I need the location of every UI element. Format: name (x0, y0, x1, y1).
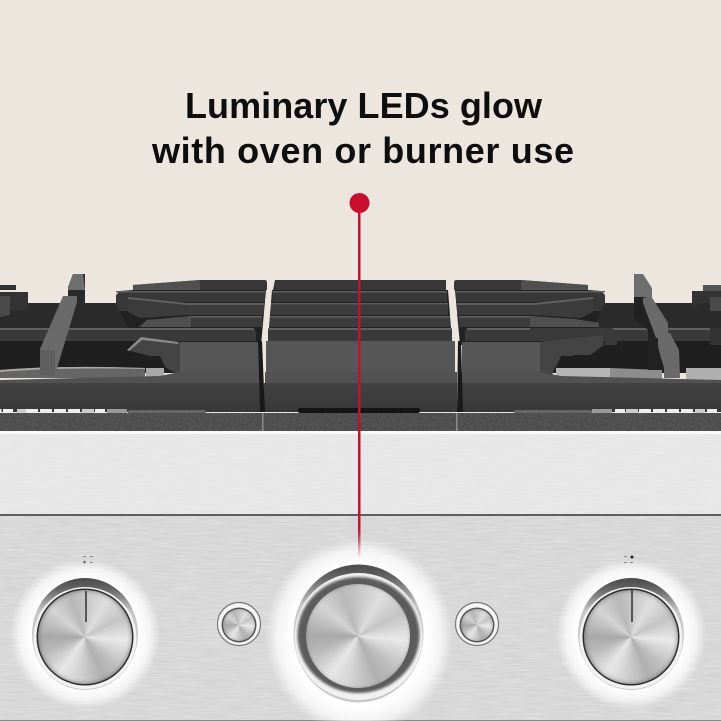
upper steel panel (0, 431, 721, 514)
centre grate (258, 280, 463, 413)
left grate (0, 280, 267, 412)
title: with oven or burner use (151, 130, 574, 171)
burner caps (0, 367, 721, 380)
indicator dots left (83, 556, 93, 563)
cooktop surface (0, 413, 721, 431)
right knob pointer (630, 590, 632, 622)
lower steel panel (0, 514, 721, 721)
left small knob face (223, 609, 255, 641)
indicator dots right (624, 556, 634, 563)
right grate finger tips (530, 316, 617, 375)
LED glow: centre knob (265, 538, 453, 721)
left outer bars (0, 274, 85, 375)
LED glow: left knob (10, 559, 160, 709)
right grate (454, 280, 721, 412)
burner slots (0, 409, 717, 414)
centre knob face (306, 584, 410, 688)
right outer bars (634, 274, 721, 378)
right knob face (584, 590, 678, 684)
left knob pointer (84, 591, 86, 622)
red marker line (350, 193, 370, 558)
right small knob face (461, 609, 493, 641)
left knob face (38, 590, 132, 684)
dark backdrop behind grates (0, 303, 721, 373)
LED glow: right knob (556, 559, 706, 709)
knob bezels (32, 564, 684, 702)
title (151, 85, 574, 171)
title: Luminary LEDs glow (185, 85, 543, 126)
